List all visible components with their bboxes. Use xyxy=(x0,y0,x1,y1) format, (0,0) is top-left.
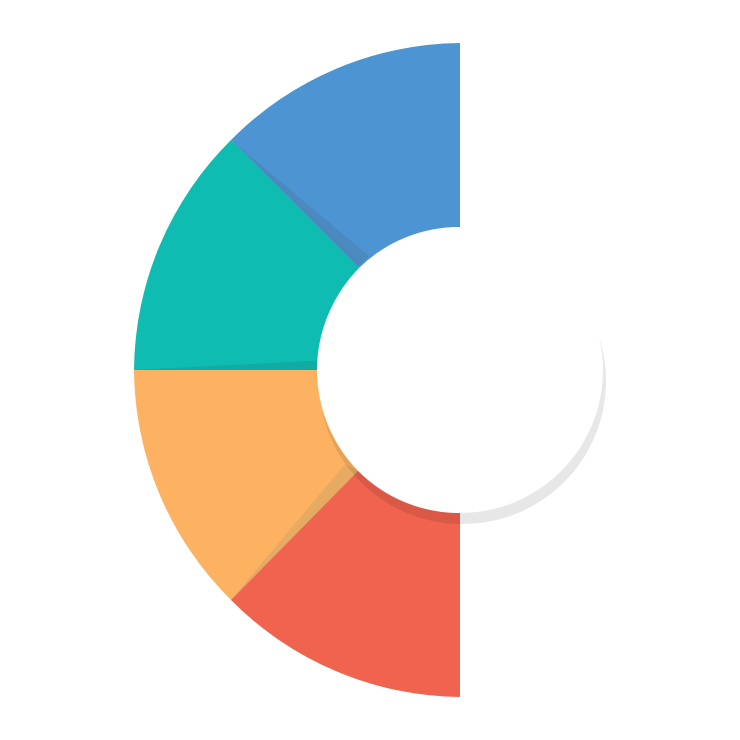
orange segment fold shadow xyxy=(231,464,358,600)
segment: blue xyxy=(231,43,460,268)
segment: teal xyxy=(134,140,359,370)
segment: orange xyxy=(134,370,358,600)
circle drop shadow xyxy=(320,238,606,524)
segment: red xyxy=(231,471,460,697)
teal segment fold shadow xyxy=(134,360,318,370)
blue segment fold shadow xyxy=(231,140,369,267)
center white circle xyxy=(317,227,603,513)
inner shadow on segments xyxy=(322,410,460,524)
